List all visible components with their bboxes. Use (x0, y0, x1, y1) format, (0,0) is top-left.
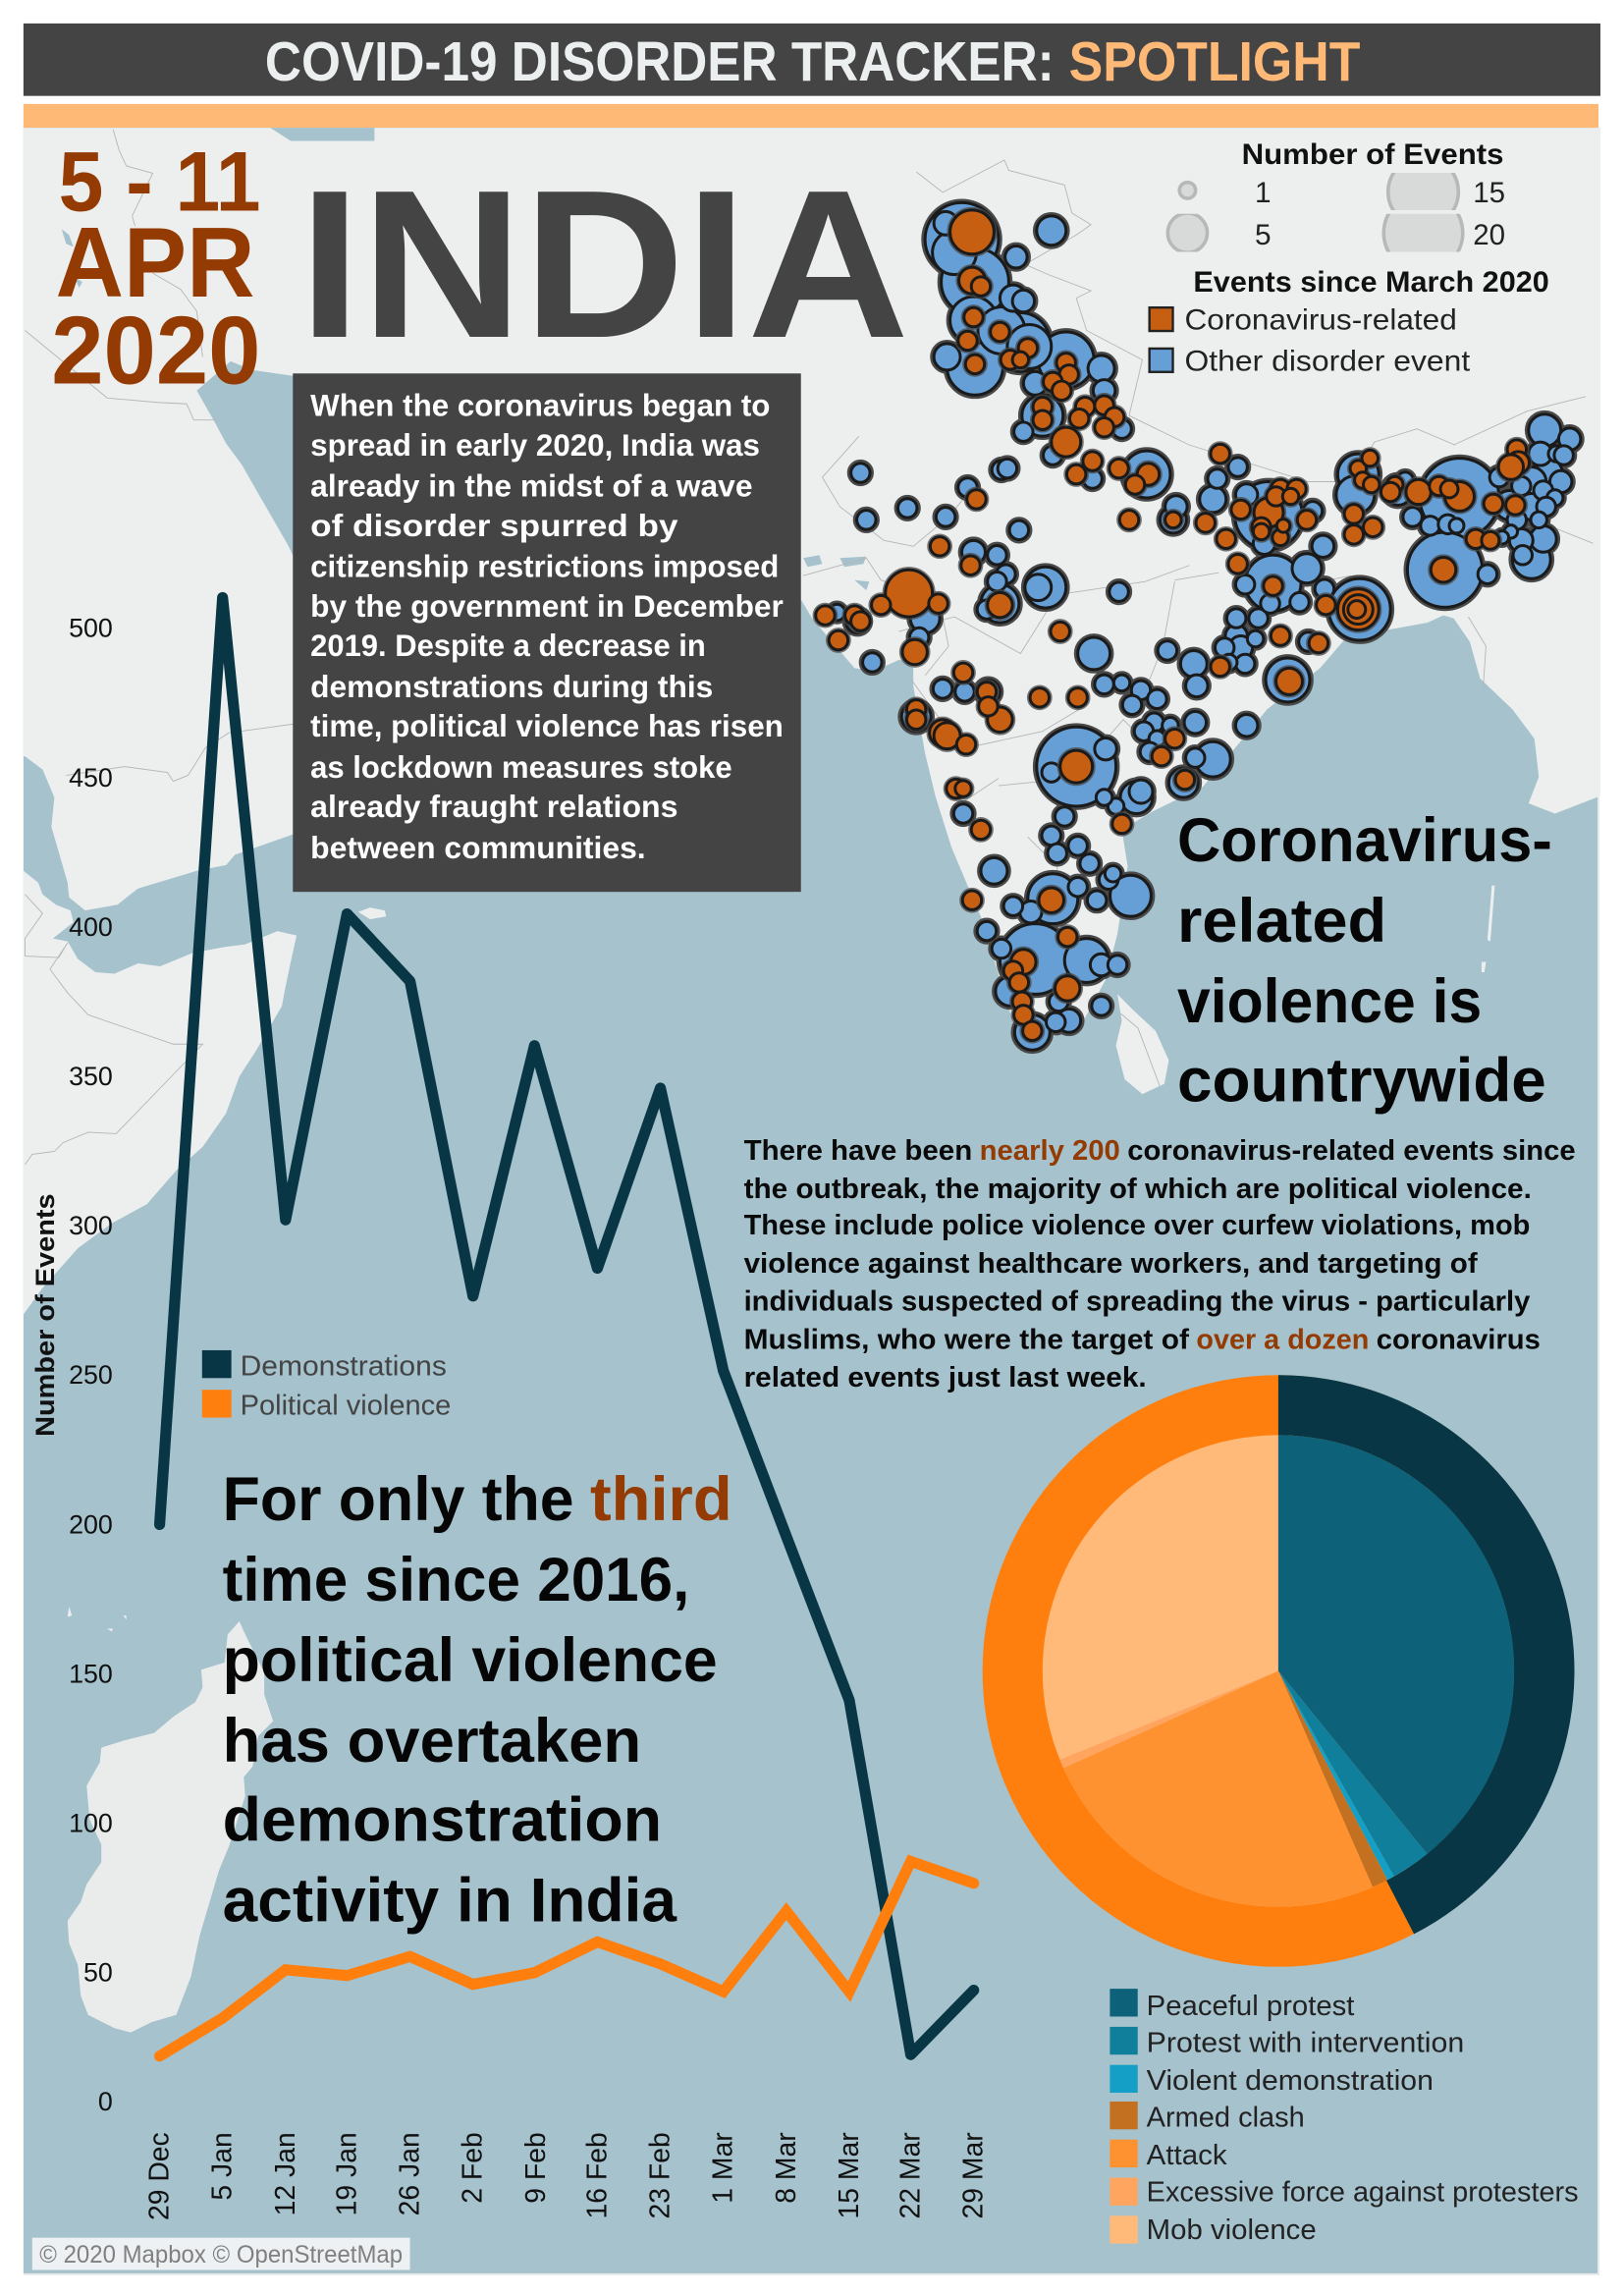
map: Asia and Arabia land (24, 128, 1600, 1052)
date heading: 5 - 11 (59, 136, 260, 230)
heading: coronavirus-related violence: countrywide (1177, 1046, 1546, 1115)
country heading: INDIA (298, 146, 909, 382)
paragraph: coronavirus-related events: individuals suspected of spreading the virus - particularly (744, 1286, 1530, 1318)
y axis labels: 200 (69, 1509, 113, 1539)
paragraph: coronavirus-related events: violence against healthcare workers, and targeting of (744, 1248, 1478, 1280)
heading: coronavirus-related violence (1177, 806, 1552, 1115)
x axis labels: 8 Mar (771, 2132, 802, 2204)
legend: events since March 2020: Coronavirus-related (1184, 304, 1457, 337)
intro text box: spread in early 2020, India was (310, 428, 760, 463)
intro text box (293, 373, 801, 892)
x axis labels: 16 Feb (581, 2132, 613, 2218)
paragraph: coronavirus-related events: There have been (744, 1135, 972, 1167)
pie legend: Excessive force against protesters (1147, 2176, 1579, 2208)
y axis labels (69, 614, 113, 2116)
legend: number of events: Number of Events (1242, 138, 1504, 171)
heading: political violence overtaken (223, 1465, 732, 1936)
x axis labels (144, 2132, 990, 2220)
paragraph: coronavirus-related events: Muslims, who were the target of (744, 1324, 1189, 1355)
map: small islands (68, 886, 1494, 1631)
date heading (51, 136, 260, 405)
x axis labels: 19 Jan (331, 2132, 362, 2215)
y axis title: Number of Events (30, 1193, 60, 1437)
line: demonstrations (160, 597, 974, 2054)
y axis labels: 500 (69, 614, 113, 643)
y axis labels: 100 (69, 1809, 113, 1838)
orange header stripe (24, 104, 1598, 128)
paragraph: coronavirus-related events: These include police violence over curfew violations, mob (744, 1210, 1530, 1241)
pie legend (1110, 1989, 1579, 2246)
paragraph: coronavirus-related events: coronavirus (1377, 1324, 1541, 1355)
heading: political violence overtaken: For only the (223, 1465, 574, 1534)
line chart legend: Demonstrations (241, 1350, 447, 1382)
heading: political violence overtaken: time since 2016, (223, 1546, 689, 1614)
pie legend: Peaceful protest (1147, 1991, 1354, 2022)
size legend circles (1166, 173, 1465, 251)
legend: number of events: 5 (1255, 219, 1272, 251)
title bar (24, 24, 1600, 96)
y axis labels: 400 (69, 912, 113, 942)
x axis labels: 9 Feb (520, 2132, 552, 2204)
intro text box: already fraught relations (310, 790, 677, 824)
y axis labels: 250 (69, 1360, 113, 1390)
legend: number of events: 15 (1473, 177, 1505, 209)
legend: number of events: 1 (1255, 177, 1272, 209)
line chart (30, 597, 990, 2220)
title bar: SPOTLIGHT (1069, 31, 1360, 93)
legend: number of events: 20 (1473, 219, 1505, 251)
paragraph: coronavirus-related events (744, 1135, 1576, 1394)
line chart legend: Political violence (241, 1391, 451, 1422)
paragraph: coronavirus-related events: the outbreak, the majority of which are political violence. (744, 1174, 1532, 1205)
line chart legend (202, 1350, 451, 1422)
nested pie chart (983, 1375, 1574, 1967)
x axis labels: 2 Feb (458, 2132, 489, 2204)
paragraph: coronavirus-related events: coronavirus-related events since (1127, 1135, 1576, 1167)
intro text box: time, political violence has risen (310, 709, 784, 743)
intro text box: by the government in December (310, 589, 784, 624)
y axis labels: 0 (98, 2087, 113, 2116)
pie legend: Mob violence (1147, 2214, 1317, 2246)
map: country borders (25, 130, 1594, 1165)
heading: political violence overtaken: activity in India (223, 1867, 677, 1936)
x axis labels: 29 Mar (958, 2132, 990, 2218)
inner slices (1043, 1435, 1514, 1907)
map: Madagascar (68, 1621, 273, 2033)
date heading: 2020 (51, 297, 260, 405)
legend: events since March 2020: Other disorder event (1184, 345, 1471, 377)
heading: political violence overtaken: political violence (223, 1626, 718, 1695)
pie legend: Armed clash (1147, 2102, 1305, 2133)
heading: political violence overtaken: demonstration (223, 1786, 662, 1855)
intro text box: demonstrations during this (310, 670, 713, 704)
pie legend: Protest with intervention (1147, 2027, 1464, 2058)
intro text box: as lockdown measures stoke (310, 750, 732, 785)
line: political violence (160, 1861, 974, 2056)
title bar: COVID-19 DISORDER TRACKER: (265, 31, 1055, 93)
heading: coronavirus-related violence: related (1177, 887, 1386, 956)
x axis labels: 5 Jan (207, 2132, 239, 2201)
x axis labels: 15 Mar (834, 2132, 865, 2218)
heading: political violence overtaken: has overtaken (223, 1707, 641, 1776)
intro text box: of disorder spurred by (310, 509, 678, 543)
map bubbles: events (816, 202, 1581, 1050)
intro text box: between communities. (310, 831, 646, 865)
date heading: APR (56, 207, 255, 318)
heading: coronavirus-related violence: Coronavirus- (1177, 806, 1552, 875)
paragraph: coronavirus-related events: over a dozen (1196, 1324, 1369, 1355)
y axis labels: 150 (69, 1659, 113, 1688)
coronavirus-related bubbles (816, 210, 1530, 1041)
x axis labels: 22 Mar (895, 2132, 927, 2218)
heading: political violence overtaken: third (590, 1465, 732, 1534)
outer ring (983, 1375, 1574, 1967)
x axis labels: 29 Dec (144, 2132, 176, 2220)
y axis labels: 450 (69, 763, 113, 793)
legend: number of events (1166, 143, 1504, 251)
x axis labels: 23 Feb (645, 2132, 677, 2218)
intro text box: 2019. Despite a decrease in (310, 629, 706, 663)
map attribution: © 2020 Mapbox © OpenStreetMap (39, 2241, 403, 2269)
y axis labels: 300 (69, 1211, 113, 1240)
heading: coronavirus-related violence: violence is (1177, 967, 1482, 1036)
x axis labels: 1 Mar (708, 2132, 739, 2204)
intro text box: already in the midst of a wave (310, 469, 753, 504)
other disorder event bubbles (829, 202, 1581, 1050)
paragraph: coronavirus-related events: nearly 200 (980, 1135, 1120, 1167)
legend: events since March 2020 (1150, 266, 1549, 377)
pie legend: Violent demonstration (1147, 2065, 1434, 2097)
x axis labels: 26 Jan (395, 2132, 426, 2215)
legend: events since March 2020: Events since March 2020 (1193, 266, 1549, 299)
y axis labels: 50 (83, 1958, 113, 1988)
pie legend: Attack (1147, 2140, 1227, 2171)
intro text box: citizenship restrictions imposed (310, 550, 779, 584)
x axis labels: 12 Jan (270, 2132, 301, 2215)
map: Africa land (24, 871, 297, 1314)
y axis labels: 350 (69, 1062, 113, 1091)
intro text box: When the coronavirus began to (310, 389, 770, 423)
map: inland waters (62, 128, 869, 590)
paragraph: coronavirus-related events: related events just last week. (744, 1362, 1147, 1394)
